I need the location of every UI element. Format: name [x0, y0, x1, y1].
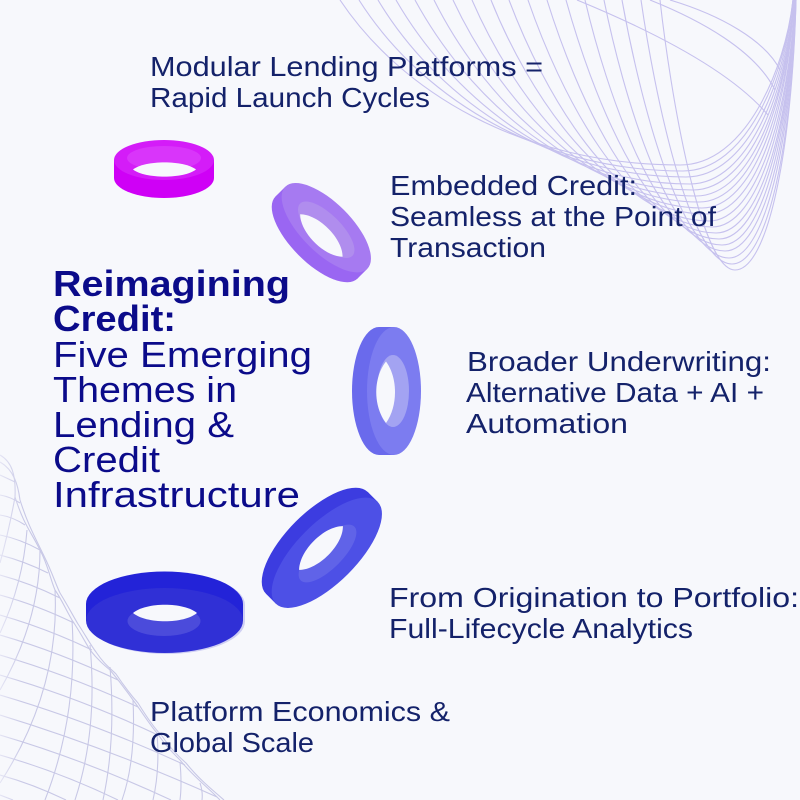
title: Reimagining [53, 263, 290, 304]
title: Credit [53, 439, 160, 480]
ring 4: indigo [245, 471, 399, 625]
theme 3 label [466, 346, 771, 439]
theme 1 label: Rapid Launch Cycles [150, 82, 430, 113]
theme 5 label: Platform Economics & [150, 696, 450, 727]
theme 3 label: Alternative Data + AI + [466, 377, 764, 408]
theme 5 label [150, 696, 450, 758]
ring 5: deep blue [86, 572, 245, 654]
ring 2: violet [258, 169, 385, 296]
decorative wave mesh: bottom left [0, 455, 224, 800]
ring 1: magenta [114, 140, 214, 198]
theme 4 label: From Origination to Portfolio: [389, 582, 799, 613]
theme 4 label [389, 582, 799, 644]
theme 3 label: Automation [466, 408, 628, 439]
theme 2 label: Embedded Credit: [390, 170, 637, 201]
title: Infrastructure [53, 474, 300, 515]
title: Lending & [53, 404, 234, 445]
title: Five Emerging [53, 334, 312, 375]
theme 2 label [390, 170, 716, 263]
decorative wave mesh: top right [340, 0, 796, 270]
theme 1 label [150, 51, 543, 113]
theme 4 label: Full-Lifecycle Analytics [389, 613, 693, 644]
title: Themes in [53, 369, 237, 410]
theme 3 label: Broader Underwriting: [467, 346, 771, 377]
theme 5 label: Global Scale [150, 727, 314, 758]
theme 2 label: Transaction [390, 232, 546, 263]
theme 2 label: Seamless at the Point of [390, 201, 716, 232]
title [53, 263, 312, 515]
ring 3: periwinkle [352, 327, 421, 455]
title: Credit: [53, 298, 176, 339]
theme 1 label: Modular Lending Platforms = [150, 51, 543, 82]
